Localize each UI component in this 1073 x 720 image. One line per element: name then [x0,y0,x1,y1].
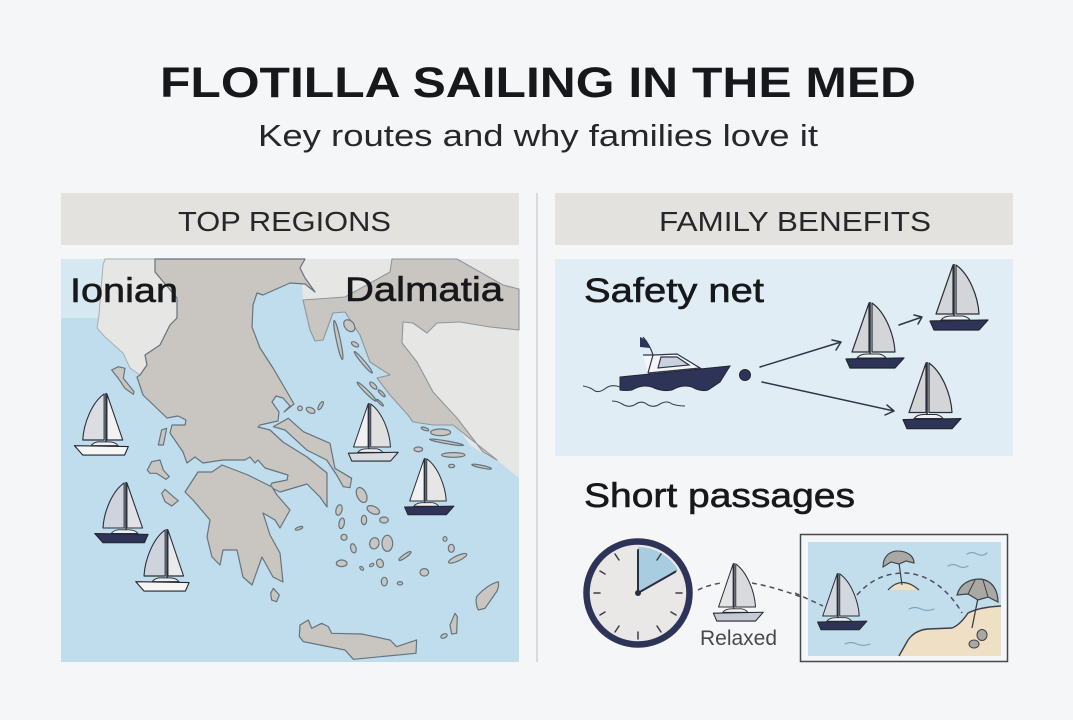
panel: top regions [61,193,519,662]
heading: short passages: Short passages [584,477,855,515]
arrow to first yacht [760,340,841,367]
icon: navy sailboat, Ionian middle [95,482,148,543]
icon: clock [586,542,690,644]
icon: navy sailboat C [903,362,961,429]
arrow to second yacht [899,315,922,325]
icon: relaxed sailboat [713,563,763,621]
icon: white sailboat, Ionian north [74,393,128,455]
heading: family benefits: FAMILY BENEFITS [659,206,931,237]
label: Dalmatia: Dalmatia [345,271,503,309]
column divider [536,193,538,662]
icon: motor boat [583,337,730,406]
heading: top regions: TOP REGIONS [178,206,391,237]
subtitle: Key routes and why families love it [258,118,818,153]
arrow to third yacht [762,382,894,415]
icon: grey sailboat, Aegean [348,403,398,461]
icon: navy sailboat, Aegean [405,458,454,515]
beach scene [795,534,1008,662]
icon: navy sailboat in beach scene [818,573,867,630]
icon: navy sailboat B [930,264,988,330]
heading: top regions [61,193,519,245]
label: Ionian: Ionian [70,272,178,310]
dashed route, right of relaxed boat [752,583,823,606]
map of Greece and the Adriatic [61,259,519,662]
heading: safety net: Safety net [584,272,765,310]
title: FLOTILLA SAILING IN THE MED [160,59,916,107]
lead boat dot [740,370,750,380]
icon: white sailboat, Ionian south [136,529,189,591]
heading: family benefits [555,193,1013,245]
panel: family benefits [555,193,1013,662]
panel: safety net [555,259,1013,456]
label: relaxed: Relaxed [700,627,777,650]
dashed route, left of relaxed boat [698,583,721,590]
icon: navy sailboat A [846,302,904,368]
